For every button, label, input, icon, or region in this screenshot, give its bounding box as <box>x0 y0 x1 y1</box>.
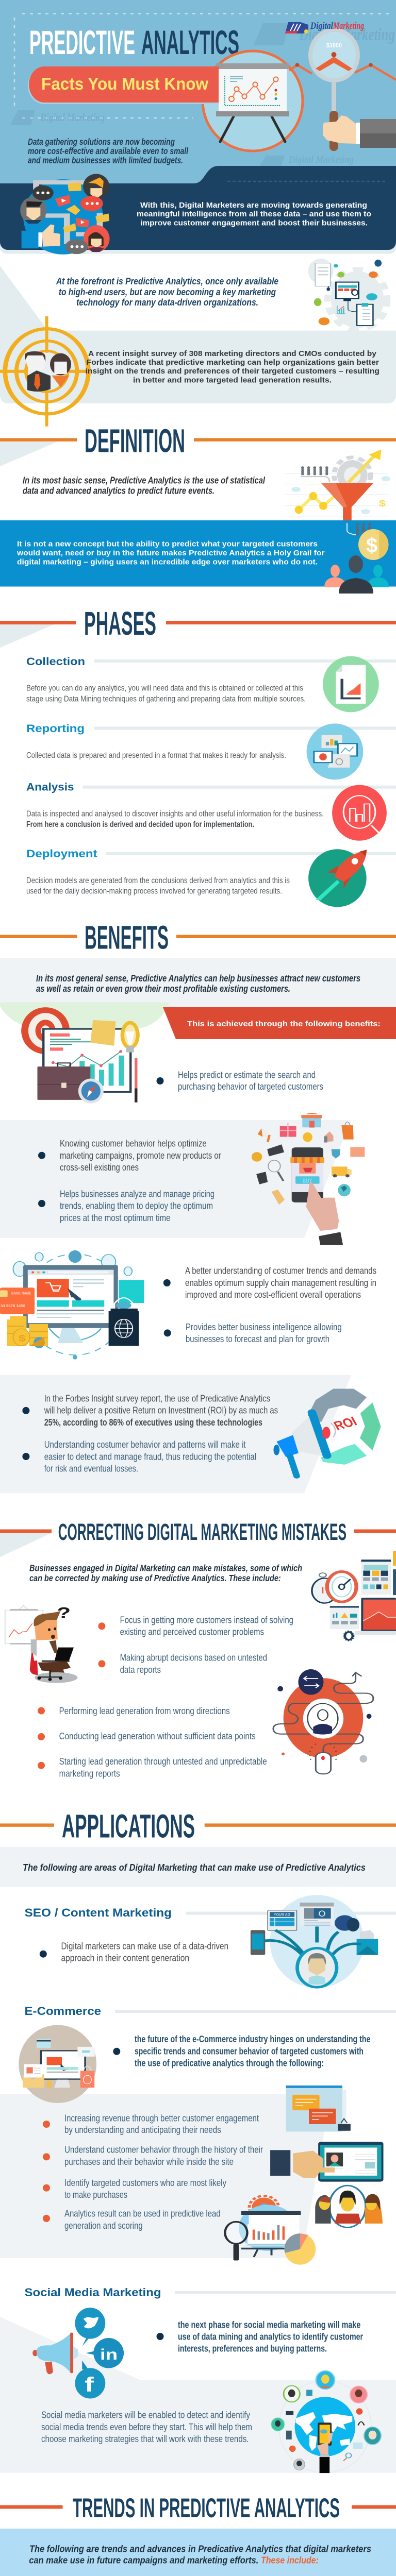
icon: deployment rocket <box>308 849 367 907</box>
bullet group: e-commerce list: Identify targeted customers who are most likely <box>64 2178 226 2188</box>
icon: customer profile with mouse path <box>273 1669 373 1774</box>
bullet group: supply chain and business intelligence: improved and more cost-efficient overall operations <box>185 1290 361 1300</box>
phase: reporting <box>26 723 396 760</box>
phase: analysis: Data is inspected and analysed to discover insights and other useful information for the business. <box>26 810 324 818</box>
icon: digital marketing logo: Digital <box>310 21 334 31</box>
panel: customer behaviour and pricing benefits: Helps businesses analyze and manage pricing <box>60 1189 214 1199</box>
icon: hand with magnifier over a line chart: $1000 <box>326 42 342 49</box>
application: seo content marketing: approach in their content generation <box>61 1953 189 1963</box>
title: ANALYTICS <box>141 23 239 61</box>
icon: customers with dollar coin: $ <box>366 534 377 557</box>
icon: hand with magnifier over a line chart <box>289 30 396 151</box>
text block: definition <box>23 475 266 496</box>
panel: holy grail blue band: It is not a new concept but the ability to predict what your targeted customers <box>17 540 318 549</box>
text block: predictive analytics forefront: At the forefront is Predictive Analytics, once only available <box>56 276 278 286</box>
panel: benefits intro <box>0 958 396 1007</box>
bullet group: supply chain and business intelligence: Provides better business intelligence allowing <box>186 1322 342 1332</box>
panel: white section background triangle <box>0 266 48 331</box>
heading: definition <box>0 422 396 466</box>
phase: deployment: Decision models are generated from the conclusions derived from analytics and this is <box>26 876 290 885</box>
bullet group: mistakes list: Focus in getting more customers instead of solving <box>120 1615 293 1625</box>
bullet group: mistakes list <box>38 1615 293 1778</box>
bullet group: social media: choose marketing strategies that will work with these trends. <box>41 2434 249 2444</box>
heading: phases: PHASES <box>84 605 156 642</box>
text block: survey insight: in better and more targeted lead generation results. <box>133 376 332 384</box>
panel: roi and fraud benefits: Understanding costumer behavior and patterns will make it <box>44 1439 246 1450</box>
panel: trends intro: can make use in future campaigns and marketing efforts. <box>29 2554 258 2565</box>
icon: presentation board in orange circle <box>203 51 303 151</box>
text block: survey insight: A recent insight survey of 308 marketing directors and CMOs conducted by <box>88 350 376 358</box>
text block: data gathering intro: more cost-effective and available even to small <box>28 146 189 156</box>
icon: megaphone with social bubbles <box>32 2308 124 2398</box>
bullet group: e-commerce list: Analytics result can be used in predictive lead <box>64 2208 221 2218</box>
panel: hero background: Digital Marketing <box>40 111 105 124</box>
text block: mistakes intro: can be corrected by making use of Predictive Analytics. These include: <box>29 1573 281 1583</box>
panel: roi and fraud benefits: 25%, according to 86% of executives using these technologies <box>44 1417 262 1428</box>
bullet group: e-commerce list: Increasing revenue through better customer engagement <box>64 2113 259 2124</box>
icon: digital marketing logo: Marketing <box>333 21 364 31</box>
phase: collection <box>26 656 396 703</box>
panel: digital marketers dark band: meaningful intelligence from all these data – and use them to <box>137 210 371 218</box>
icon: analytics dashboard and speedometer <box>312 1551 396 1641</box>
icon: e-commerce monitor in beige circle <box>19 2025 96 2103</box>
bullet: predict search behaviour: purchasing behavior of targeted customers <box>178 1081 323 1092</box>
icon: gear with analytics icons <box>308 259 387 330</box>
panel: e-commerce list background <box>0 2094 331 2258</box>
text block: mistakes intro: Businesses engaged in Digital Marketing can make mistakes, some of which <box>29 1563 302 1573</box>
bullet: predict search behaviour <box>157 1070 323 1092</box>
title: PREDICTIVE <box>29 23 135 61</box>
panel: digital marketers dark band <box>0 166 396 254</box>
bullet group: social media: interests, preferences and buying patterns. <box>178 2343 327 2353</box>
application: social media marketing heading: Social Media Marketing <box>25 2286 161 2299</box>
icon: online shopping monitor with coins and card: 34 5678 3456 <box>1 1304 25 1308</box>
icon: content network around a person: YOUR AD <box>274 1912 290 1917</box>
heading: benefits: BENEFITS <box>85 919 169 956</box>
phase: collection: stage using Data Mining techniques of gathering and preparing data from multiple sources. <box>26 694 306 703</box>
bullet group: e-commerce list <box>43 2113 263 2231</box>
icon: target monitor briefcase and bulb <box>0 1002 169 1104</box>
phase: reporting: Reporting <box>26 723 85 735</box>
panel: roi and fraud benefits <box>0 1375 351 1493</box>
application: seo content marketing: SEO / Content Marketing <box>25 1906 172 1919</box>
icon: customers with dollar coin <box>324 523 389 594</box>
bullet group: social media <box>41 2320 363 2444</box>
phase: collection: Collection <box>26 656 85 668</box>
bullet: predict search behaviour: Helps predict or estimate the search and <box>178 1070 316 1080</box>
panel: customer behaviour and pricing benefits: Knowing customer behavior helps optimize <box>60 1138 207 1148</box>
text block: definition: data and advanced analytics to predict future events. <box>23 485 214 496</box>
panel: applications intro <box>0 1847 396 1887</box>
icon: funnel with gear and rising arrow <box>285 449 390 520</box>
icon: reporting charts <box>307 723 363 779</box>
bullet group: mistakes list: Making abrupt decisions based on untested <box>120 1653 267 1663</box>
icon: online shopping monitor with coins and card: $ <box>19 1333 26 1344</box>
text block: data gathering intro: Data gathering solutions are now becoming <box>28 137 175 147</box>
icon: target with two people <box>0 316 88 427</box>
phase: analysis <box>26 782 396 829</box>
panel: holy grail blue band <box>0 520 396 586</box>
phase: deployment: used for the daily decision-making process involved for generating targeted results. <box>26 887 282 896</box>
phase: deployment: Deployment <box>26 848 97 860</box>
application: e-commerce intro: the use of predicative analytics through the following: <box>135 2058 324 2069</box>
heading: applications <box>0 1807 396 1844</box>
bullet group: mistakes list: Performing lead generation from wrong directions <box>59 1706 230 1716</box>
icon: smartphone shop with shopping icons: BUY <box>303 1178 312 1184</box>
panel: achieved through benefits banner: This is achieved through the following benefits: <box>187 1020 381 1028</box>
bullet group: supply chain and business intelligence: businesses to forecast and plan for growth <box>186 1334 329 1344</box>
panel: achieved through benefits banner <box>163 1007 396 1039</box>
application: e-commerce intro: E-Commerce <box>25 2005 101 2018</box>
icon: digital marketing logo <box>285 21 364 33</box>
panel: roi and fraud benefits: will help deliver a positive Return on Investment (ROI) by as much as <box>44 1405 278 1416</box>
icon: collection document chart <box>323 656 379 712</box>
icon: social people and messages network <box>20 174 110 255</box>
panel: customer behaviour and pricing benefits: cross-sell existing ones <box>60 1162 139 1173</box>
bullet group: e-commerce list: to make purchases <box>64 2190 127 2200</box>
icon: analysis magnifier bars <box>332 785 387 841</box>
application: social media marketing heading <box>0 2286 396 2473</box>
bullet group: e-commerce list: purchases and their behavior while inside the site <box>64 2157 234 2167</box>
phase: deployment <box>26 848 396 896</box>
heading: phases <box>0 605 396 648</box>
icon: megaphone with social bubbles: f <box>85 2374 94 2396</box>
panel: customer behaviour and pricing benefits: marketing campaigns, promote new products or <box>60 1150 221 1161</box>
text block: survey insight: insight on the trends and preferences of their targeted customers – resulting <box>86 367 380 376</box>
panel: roi and fraud benefits: In the Forbes Insight survey report, the use of Predicative Analytics <box>44 1394 270 1404</box>
text block: definition: In its most basic sense, Predictive Analytics is the use of statistical <box>23 475 266 485</box>
phase: analysis: Analysis <box>26 782 74 793</box>
panel: facts you must know banner: Facts You Must Know <box>41 74 208 93</box>
icon: chat window tablet hand and target customers <box>225 2086 384 2265</box>
panel: digital marketers dark band: With this, Digital Marketers are moving towards generating <box>140 201 367 210</box>
icon: globe with connected people <box>271 2371 381 2473</box>
icon: smartphone shop with shopping icons <box>252 1113 365 1245</box>
text block: predictive analytics forefront <box>56 276 278 308</box>
panel: digital marketers dark band: improve customer engagement and boost their businesses. <box>140 219 368 228</box>
panel: customer behaviour and pricing benefits: trends, enabling them to deploy the optimum <box>60 1201 213 1211</box>
text block: mistakes intro <box>29 1563 302 1583</box>
application: seo content marketing: Digital marketers can make use of a data-driven <box>61 1941 228 1951</box>
application: e-commerce intro <box>25 2005 396 2069</box>
panel: roi and fraud benefits: easier to detect and manage fraud, thus reducing the potential <box>44 1451 256 1462</box>
bullet group: mistakes list: existing and perceived customer problems <box>120 1627 264 1637</box>
bullet group: e-commerce list: by understanding and anticipating their needs <box>64 2125 221 2135</box>
panel: holy grail blue band: would want, need or buy in the future makes Predictive Analytics a Holy Grail for <box>16 549 325 557</box>
icon: megaphone with roi ring: ROI <box>331 1414 359 1433</box>
panel: hero background: Digital Marketing <box>288 154 354 165</box>
panel: facts you must know banner <box>28 66 219 104</box>
bullet group: supply chain and business intelligence <box>163 1266 376 1344</box>
text block: data gathering intro: and medium businesses with limited budgets. <box>28 155 183 165</box>
text block: predictive analytics forefront: technology for many data-driven organizations. <box>76 297 258 308</box>
text block: data gathering intro <box>28 137 189 165</box>
panel: holy grail blue band: digital marketing – giving users an incredible edge over marketers who do not. <box>17 557 318 567</box>
text block: survey insight: Forbes indicate that predictive marketing can help organizations gain better <box>87 359 379 367</box>
heading: definition: DEFINITION <box>85 422 185 460</box>
application: seo content marketing <box>25 1906 396 1963</box>
heading: benefits <box>0 919 396 956</box>
bullet group: social media: social media trends even before they start. This will help them <box>41 2422 252 2432</box>
bullet group: e-commerce list: generation and scoring <box>64 2221 143 2231</box>
panel: benefits intro: as well as retain or even grow their most profitable existing customers. <box>36 984 290 994</box>
text block: predictive analytics forefront: to high-end users, but are now becoming a key marketing <box>59 287 276 297</box>
phase: collection: Before you can do any analytics, you will need data and this is obtained or collected at this <box>26 684 303 693</box>
bullet group: mistakes list: Starting lead generation through untested and unpredictable <box>59 1756 267 1767</box>
panel: applications intro: The following are areas of Digital Marketing that can make use of Predictive Analytics <box>23 1862 366 1873</box>
panel: hero background <box>0 0 396 191</box>
heading: applications: APPLICATIONS <box>62 1807 195 1844</box>
bullet group: social media: Social media marketers will be enabled to detect and identify <box>41 2410 250 2420</box>
bullet group: mistakes list: Conducting lead generation without sufficient data points <box>59 1731 256 1741</box>
icon: megaphone with roi ring <box>273 1389 381 1476</box>
panel: forbes survey insight <box>0 331 396 403</box>
icon: confused man at laptop <box>5 1604 77 1683</box>
icon: funnel with gear and rising arrow: $ <box>379 499 386 509</box>
phase: reporting: Collected data is prepared and presented in a format that makes it ready for analysis. <box>26 751 286 760</box>
bullet group: mistakes list: marketing reports <box>59 1768 120 1778</box>
bullet group: e-commerce list: Understand customer behavior through the history of their <box>64 2144 263 2155</box>
panel: customer behaviour and pricing benefits <box>0 1120 351 1238</box>
icon: content network around a person <box>251 1895 378 1988</box>
icon: confused man at laptop: ? <box>57 1604 71 1622</box>
bullet group: mistakes list: data reports <box>120 1665 161 1675</box>
icon: online shopping monitor with coins and card: BANK NAME <box>11 1291 31 1295</box>
icon: online shopping monitor with coins and card <box>0 1250 144 1360</box>
phase: analysis: From here a conclusion is derived and decided upon for implementation. <box>26 820 254 829</box>
panel: customer behaviour and pricing benefits: prices at the most optimum time <box>60 1213 171 1223</box>
text block: survey insight <box>86 350 380 384</box>
heading: correcting digital marketing mistakes <box>0 1519 396 1557</box>
icon: megaphone with social bubbles: in <box>100 2346 118 2363</box>
panel: trends intro: These include: <box>261 2554 319 2565</box>
panel: roi and fraud benefits: for risk and eventual losses. <box>44 1464 138 1474</box>
panel: trends intro <box>0 2529 396 2576</box>
